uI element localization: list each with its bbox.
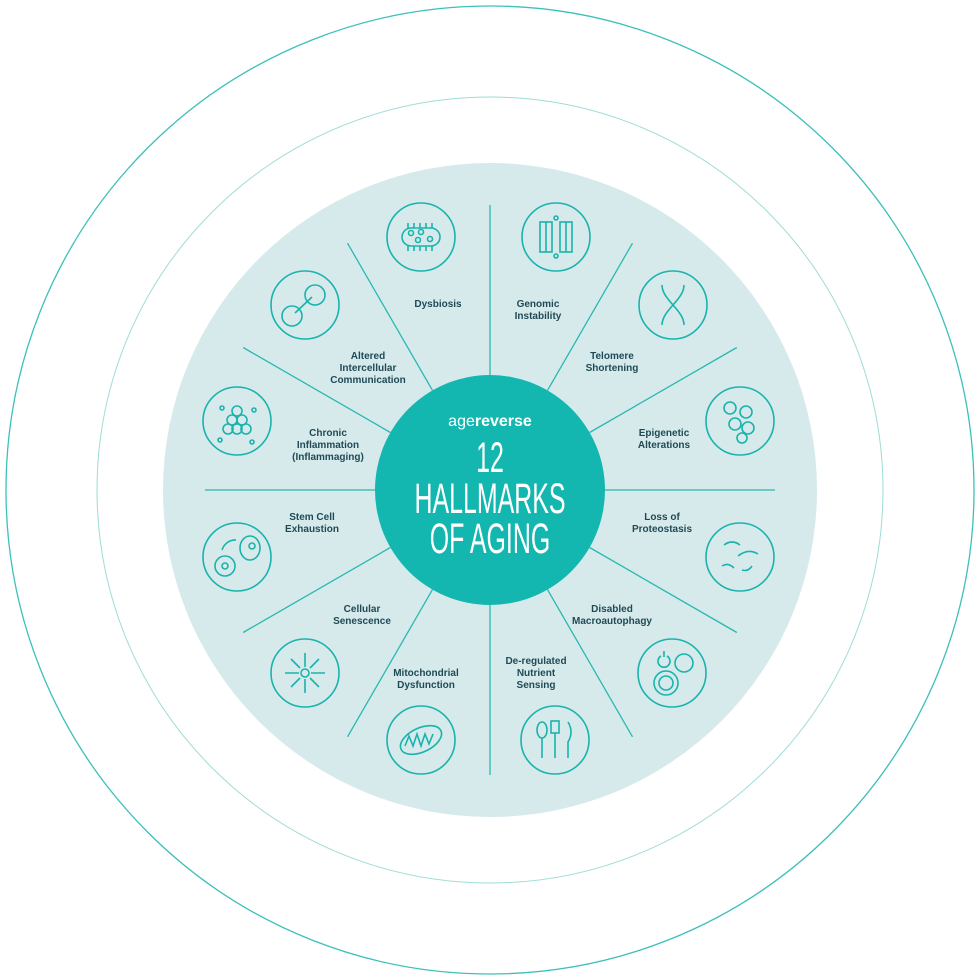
icon: genomic: [522, 203, 590, 271]
icon: intercellular: [271, 271, 339, 339]
brand: agereverse: [448, 413, 532, 430]
labels: Dysbiosis: [414, 299, 462, 310]
icon: mitochondria: [387, 706, 455, 774]
icon: macroautophagy: [638, 639, 706, 707]
center title: HALLMARKS: [415, 475, 565, 523]
labels: Altered: [351, 351, 385, 362]
center circle: [375, 375, 605, 605]
labels: Sensing: [517, 680, 555, 691]
icon: epigenetic: [706, 387, 774, 455]
labels: Inflammation: [297, 440, 359, 451]
main disc: [163, 163, 817, 817]
center title: OF AGING: [430, 515, 550, 563]
icon: stem cell: [203, 523, 271, 591]
labels: Mitochondrial: [393, 668, 459, 679]
icon: senescence: [271, 639, 339, 707]
center title: 12: [476, 434, 504, 482]
labels: Intercellular: [340, 363, 396, 374]
labels: Genomic: [517, 299, 559, 310]
labels: Exhaustion: [285, 524, 339, 535]
labels: [285, 299, 692, 691]
labels: Telomere: [590, 351, 634, 362]
labels: Chronic: [309, 428, 347, 439]
labels: Senescence: [333, 616, 391, 627]
icon: proteostasis: [706, 523, 774, 591]
labels: Proteostasis: [632, 524, 692, 535]
labels: Disabled: [591, 604, 633, 615]
labels: Epigenetic: [639, 428, 689, 439]
labels: Communication: [330, 375, 406, 386]
labels: De-regulated: [505, 656, 567, 667]
labels: Dysfunction: [397, 680, 455, 691]
icon: nutrient: [521, 706, 589, 774]
labels: Instability: [515, 311, 562, 322]
middle ring: [97, 97, 883, 883]
labels: (Inflammaging): [292, 452, 364, 463]
labels: Loss of: [644, 512, 680, 523]
icon: telomere: [639, 271, 707, 339]
labels: Stem Cell: [289, 512, 335, 523]
labels: Alterations: [638, 440, 691, 451]
labels: Nutrient: [517, 668, 556, 679]
icon: dysbiosis: [387, 203, 455, 271]
labels: Cellular: [344, 604, 380, 615]
center title: [415, 434, 565, 563]
labels: Shortening: [586, 363, 638, 374]
icons: [203, 203, 774, 774]
icon: inflammation: [203, 387, 271, 455]
spokes: [205, 205, 775, 775]
labels: Macroautophagy: [572, 616, 652, 627]
